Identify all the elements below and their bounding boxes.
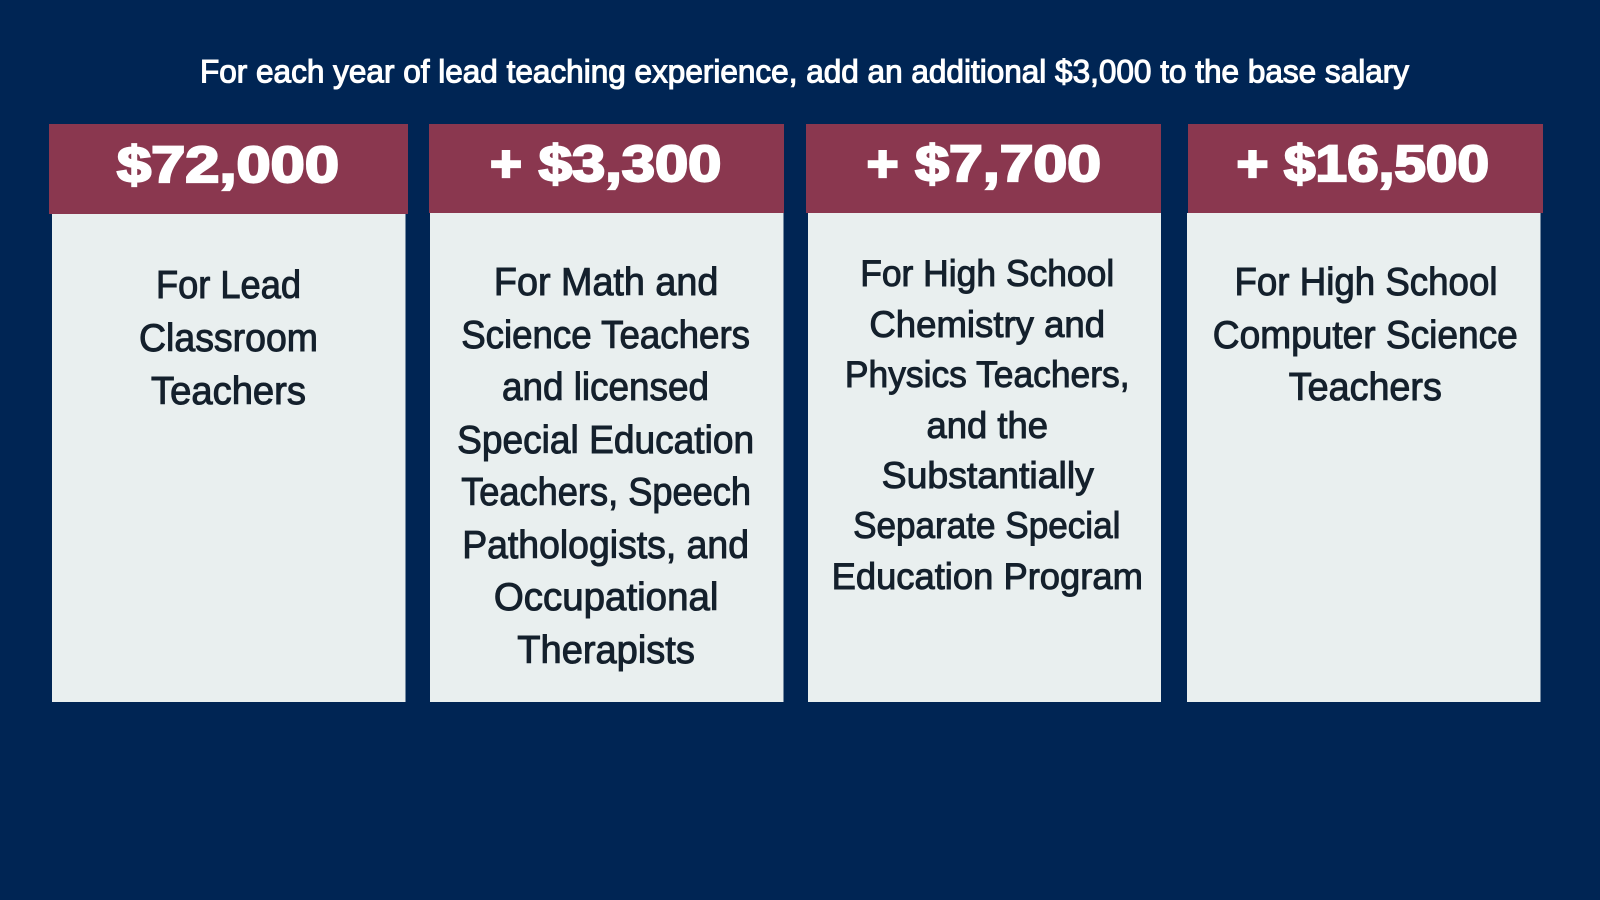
- amount: $72,000: [117, 136, 339, 193]
- description: Computer Science: [1213, 314, 1518, 357]
- description: Teachers: [1289, 366, 1442, 409]
- card body: [52, 214, 406, 702]
- panel: math and science teachers: [429, 124, 784, 702]
- description: [139, 264, 318, 413]
- panel: computer science teachers: [1187, 124, 1543, 702]
- description: [1213, 261, 1518, 409]
- description: Education Program: [832, 555, 1143, 597]
- amount: $3,300: [539, 135, 721, 192]
- amount: +: [867, 135, 899, 192]
- description: [457, 261, 754, 672]
- amount: +: [490, 135, 522, 192]
- amount: $16,500: [1284, 135, 1489, 192]
- description: Physics Teachers,: [845, 353, 1130, 395]
- description: and licensed: [502, 366, 709, 409]
- description: [832, 252, 1143, 597]
- description: Separate Special: [853, 504, 1120, 546]
- description: Special Education: [457, 419, 754, 462]
- description: Teachers: [151, 370, 306, 413]
- description: For Math and: [494, 261, 718, 304]
- header bar: [806, 124, 1161, 213]
- amount: $7,700: [915, 135, 1101, 192]
- panel: lead classroom teachers: [49, 124, 408, 702]
- description: Classroom: [139, 317, 318, 360]
- amount: +: [1236, 135, 1268, 192]
- amount: [867, 135, 1101, 192]
- amount: [490, 135, 721, 192]
- description: and the: [926, 404, 1048, 446]
- description: For High School: [860, 252, 1114, 294]
- card body: [808, 213, 1161, 702]
- card body: [1187, 213, 1540, 702]
- description: Science Teachers: [461, 314, 750, 357]
- description: For High School: [1234, 261, 1498, 304]
- description: Chemistry and: [869, 303, 1105, 345]
- description: For Lead: [156, 264, 301, 307]
- description: Therapists: [517, 629, 695, 672]
- panel: chemistry and physics teachers: [806, 124, 1161, 702]
- header bar: [49, 124, 408, 214]
- description: Substantially: [882, 454, 1094, 496]
- title: For each year of lead teaching experience, add an additional $3,000 to the base salary: [200, 54, 1409, 90]
- description: Teachers, Speech: [461, 471, 751, 514]
- description: Occupational: [494, 576, 718, 619]
- description: Pathologists, and: [462, 524, 749, 567]
- header bar: [429, 124, 784, 213]
- card body: [430, 213, 784, 702]
- header bar: [1188, 124, 1543, 213]
